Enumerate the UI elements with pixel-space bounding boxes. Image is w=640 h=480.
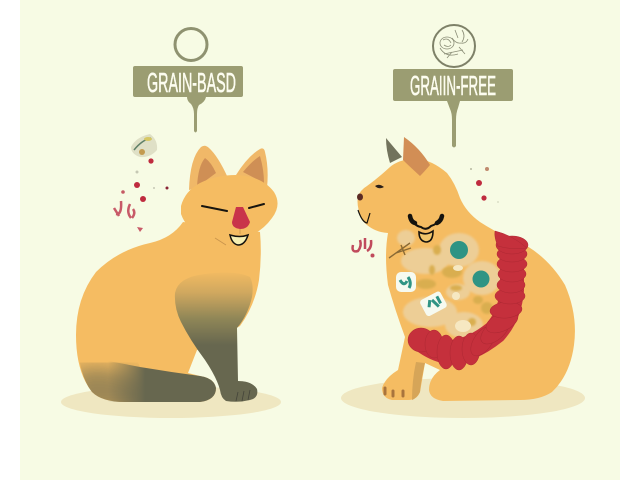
icon: empty ring	[175, 28, 207, 60]
teal cell	[450, 241, 468, 259]
pink squiggle mark	[353, 238, 371, 251]
paw toes	[236, 390, 250, 401]
sign board	[133, 66, 243, 97]
right cat	[341, 137, 585, 418]
white teal tile	[396, 272, 416, 292]
stalk sketch	[389, 243, 411, 258]
ears	[189, 146, 268, 190]
small pink squiggles	[114, 201, 134, 218]
right label: grain-free: GRAIIN-FREE	[410, 70, 496, 101]
left cat	[61, 146, 281, 418]
left label: grain-based	[133, 28, 243, 132]
white teal tile	[419, 290, 448, 317]
body and tail	[76, 222, 261, 402]
red dots	[470, 167, 499, 203]
ground shadow	[341, 378, 585, 418]
intestine	[408, 231, 528, 370]
nose	[357, 194, 363, 200]
front ear	[403, 137, 430, 176]
left symptom marks	[114, 134, 168, 232]
eyes	[202, 204, 264, 211]
back ear	[386, 138, 402, 163]
mouth	[230, 235, 248, 245]
nose	[232, 207, 250, 229]
digestive food patches	[389, 230, 501, 338]
sign board	[393, 69, 513, 101]
foreleg	[175, 273, 257, 402]
icon: sketched poultry badge	[433, 25, 475, 67]
red dots	[121, 158, 168, 202]
eye	[375, 185, 384, 188]
right label: grain-free	[393, 25, 513, 148]
sign text: GRAIN-BASD	[147, 67, 236, 98]
toes	[385, 388, 403, 396]
icon: food morsel	[131, 134, 157, 157]
black collar mark	[410, 216, 442, 242]
teal cell	[472, 270, 490, 288]
tail shading	[80, 362, 216, 402]
sign pointer	[187, 97, 206, 132]
sign pointer	[447, 101, 460, 148]
right symptom marks	[353, 167, 499, 258]
mouth	[358, 210, 370, 223]
head	[181, 175, 278, 241]
front leg shading	[412, 362, 425, 400]
ground shadow	[61, 386, 281, 418]
body	[358, 158, 575, 401]
small heart mark	[137, 227, 143, 232]
